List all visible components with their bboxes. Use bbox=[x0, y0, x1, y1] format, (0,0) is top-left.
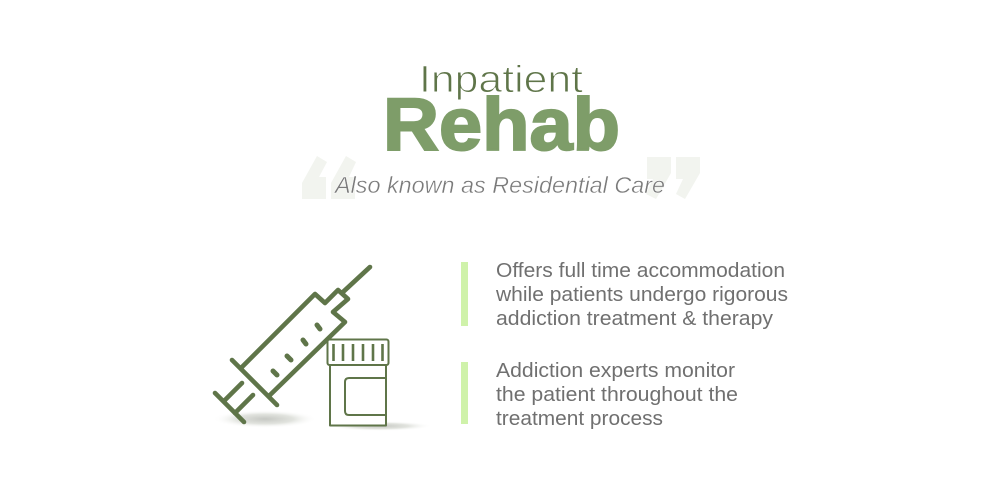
text block 2: treatment process bbox=[496, 408, 663, 430]
text block 1: addiction treatment & therapy bbox=[496, 308, 773, 330]
text block 2: the patient throughout the bbox=[496, 384, 738, 406]
accent bar 2 bbox=[461, 362, 468, 424]
decorative quote mark: right bbox=[646, 157, 700, 199]
icon: pill jar bbox=[328, 340, 388, 426]
illustration: syringe and pill jar bbox=[213, 267, 432, 431]
title: Inpatient: Inpatient bbox=[419, 59, 583, 101]
text block 1 bbox=[495, 260, 788, 330]
text block 1: Offers full time accommodation bbox=[496, 260, 785, 282]
decorative quote mark: left bbox=[302, 156, 356, 199]
title: Rehab: Rehab bbox=[383, 83, 620, 166]
text block 2 bbox=[496, 360, 738, 430]
text block 2: Addiction experts monitor bbox=[496, 360, 735, 382]
text block 1: while patients undergo rigorous bbox=[495, 284, 788, 306]
subtitle: Also known as Residential Care bbox=[333, 172, 665, 198]
shadow: jar bbox=[328, 421, 432, 431]
icon: syringe bbox=[215, 267, 370, 422]
accent bar 1 bbox=[461, 262, 468, 326]
shadow: syringe bbox=[213, 410, 317, 428]
